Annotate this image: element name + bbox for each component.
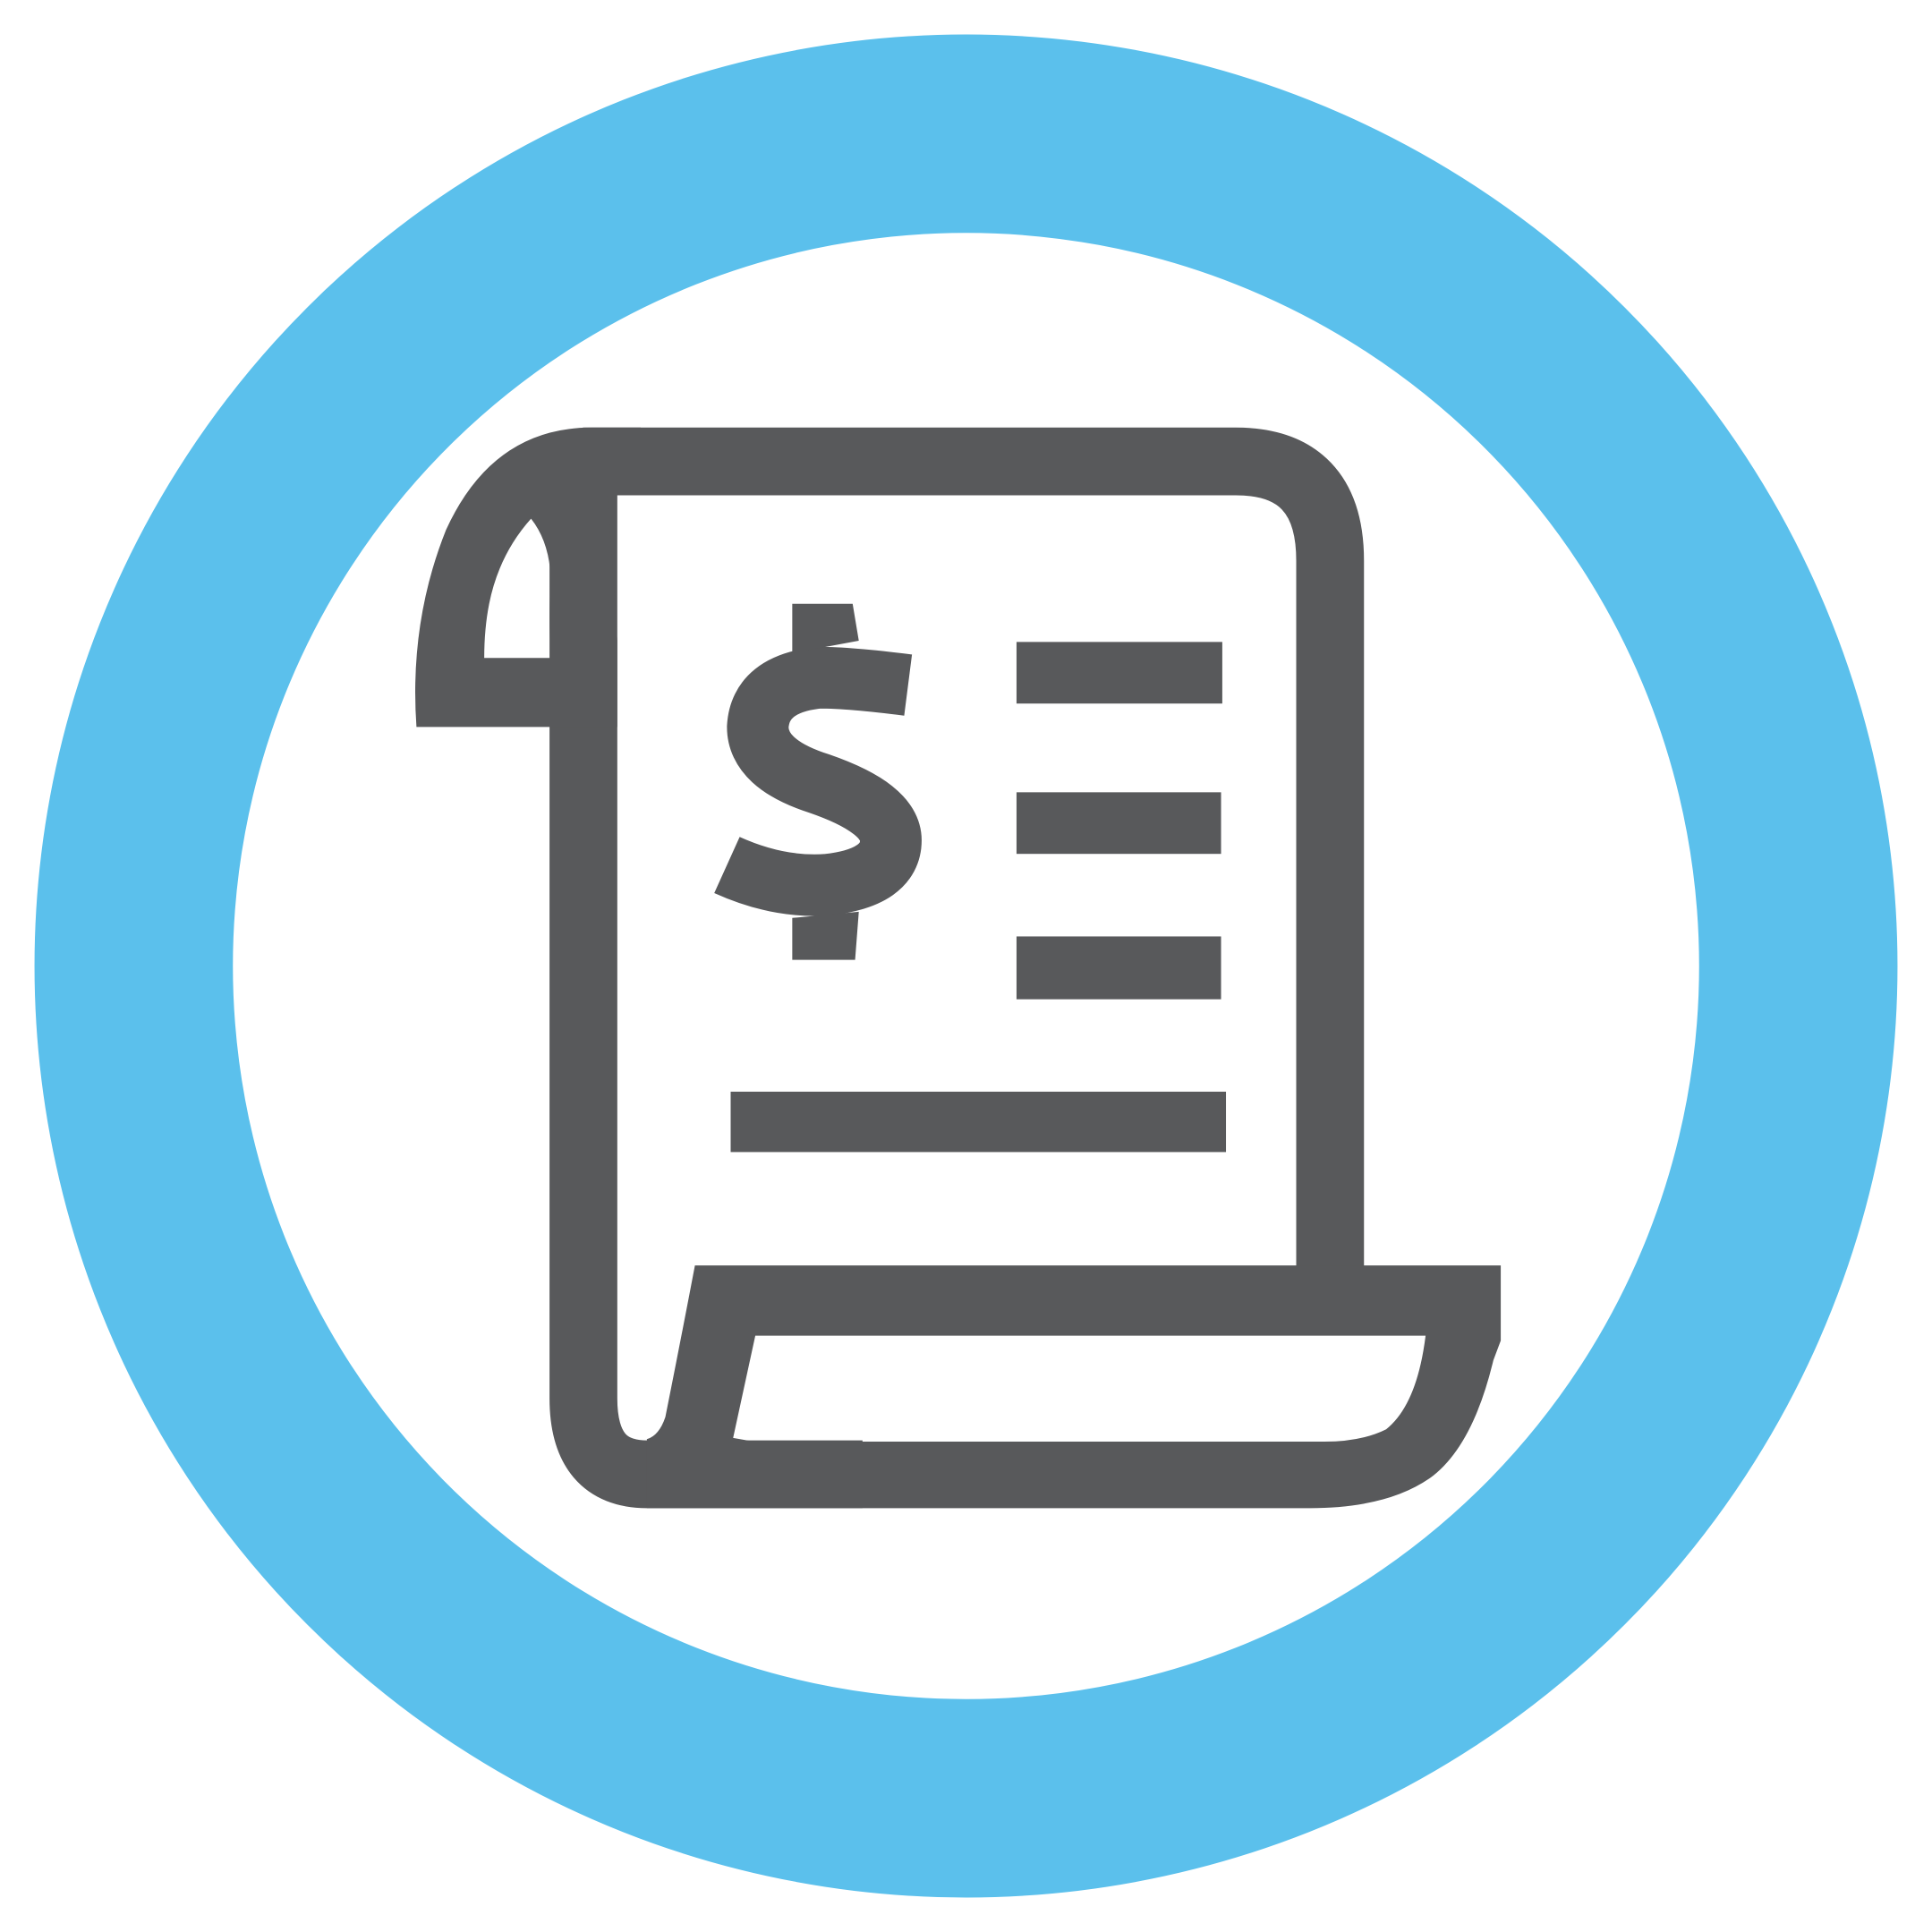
dollar sign bbox=[727, 604, 908, 960]
scroll top-left curl bbox=[415, 428, 641, 727]
ring: blue circle bbox=[133, 133, 1799, 1799]
scroll left side bbox=[583, 468, 863, 1474]
icon: scroll invoice bbox=[415, 428, 1501, 1508]
text lines bbox=[731, 642, 1226, 1152]
scroll bottom roll bbox=[647, 1265, 1501, 1508]
scroll top and right side bbox=[583, 462, 1330, 1281]
